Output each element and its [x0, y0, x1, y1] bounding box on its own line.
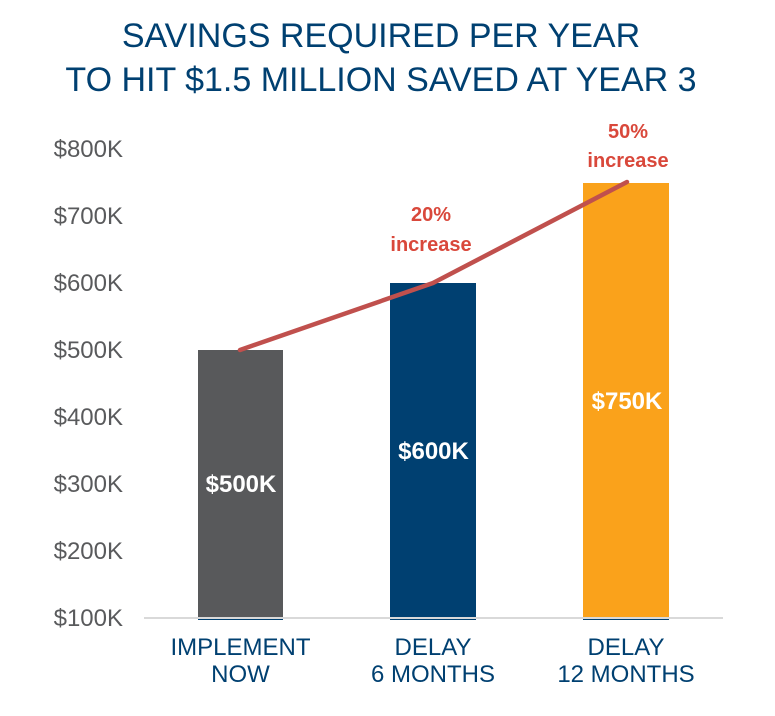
y axis labels [54, 136, 123, 632]
x axis labels [170, 634, 695, 688]
y axis labels: $600K [54, 270, 123, 297]
title: TO HIT $1.5 MILLION SAVED AT YEAR 3 [65, 61, 697, 99]
callout: 20% increase [390, 204, 472, 256]
title: SAVINGS REQUIRED PER YEAR [122, 17, 640, 55]
y axis labels: $300K [54, 471, 123, 498]
title [65, 17, 697, 99]
y axis labels: $100K [54, 605, 123, 632]
callout: 20% increase: increase [390, 234, 472, 256]
x axis labels: IMPLEMENT [170, 634, 311, 661]
y axis labels: $700K [54, 203, 123, 230]
bar: implement now: $500K [206, 471, 277, 498]
x axis line [144, 617, 723, 619]
callout: 20% increase: 20% [411, 204, 451, 226]
bar: delay 6 months: $600K [398, 438, 470, 465]
callout: 50% increase: 50% [608, 121, 648, 143]
callout: 50% increase [587, 121, 669, 172]
x axis labels: 12 MONTHS [557, 661, 695, 688]
bar: delay 12 months: $750K [592, 388, 663, 415]
x axis labels: NOW [211, 661, 270, 688]
x axis labels: DELAY [588, 634, 664, 661]
x axis labels: DELAY [395, 634, 471, 661]
bar: implement now [198, 350, 283, 620]
y axis labels: $500K [54, 337, 123, 364]
bar: delay 12 months [583, 183, 669, 620]
trend line [240, 182, 627, 350]
callout: 50% increase: increase [587, 150, 669, 172]
bar: delay 6 months [390, 283, 476, 620]
y axis labels: $200K [54, 538, 123, 565]
y axis labels: $400K [54, 404, 123, 431]
y axis labels: $800K [54, 136, 123, 163]
x axis labels: 6 MONTHS [371, 661, 495, 688]
